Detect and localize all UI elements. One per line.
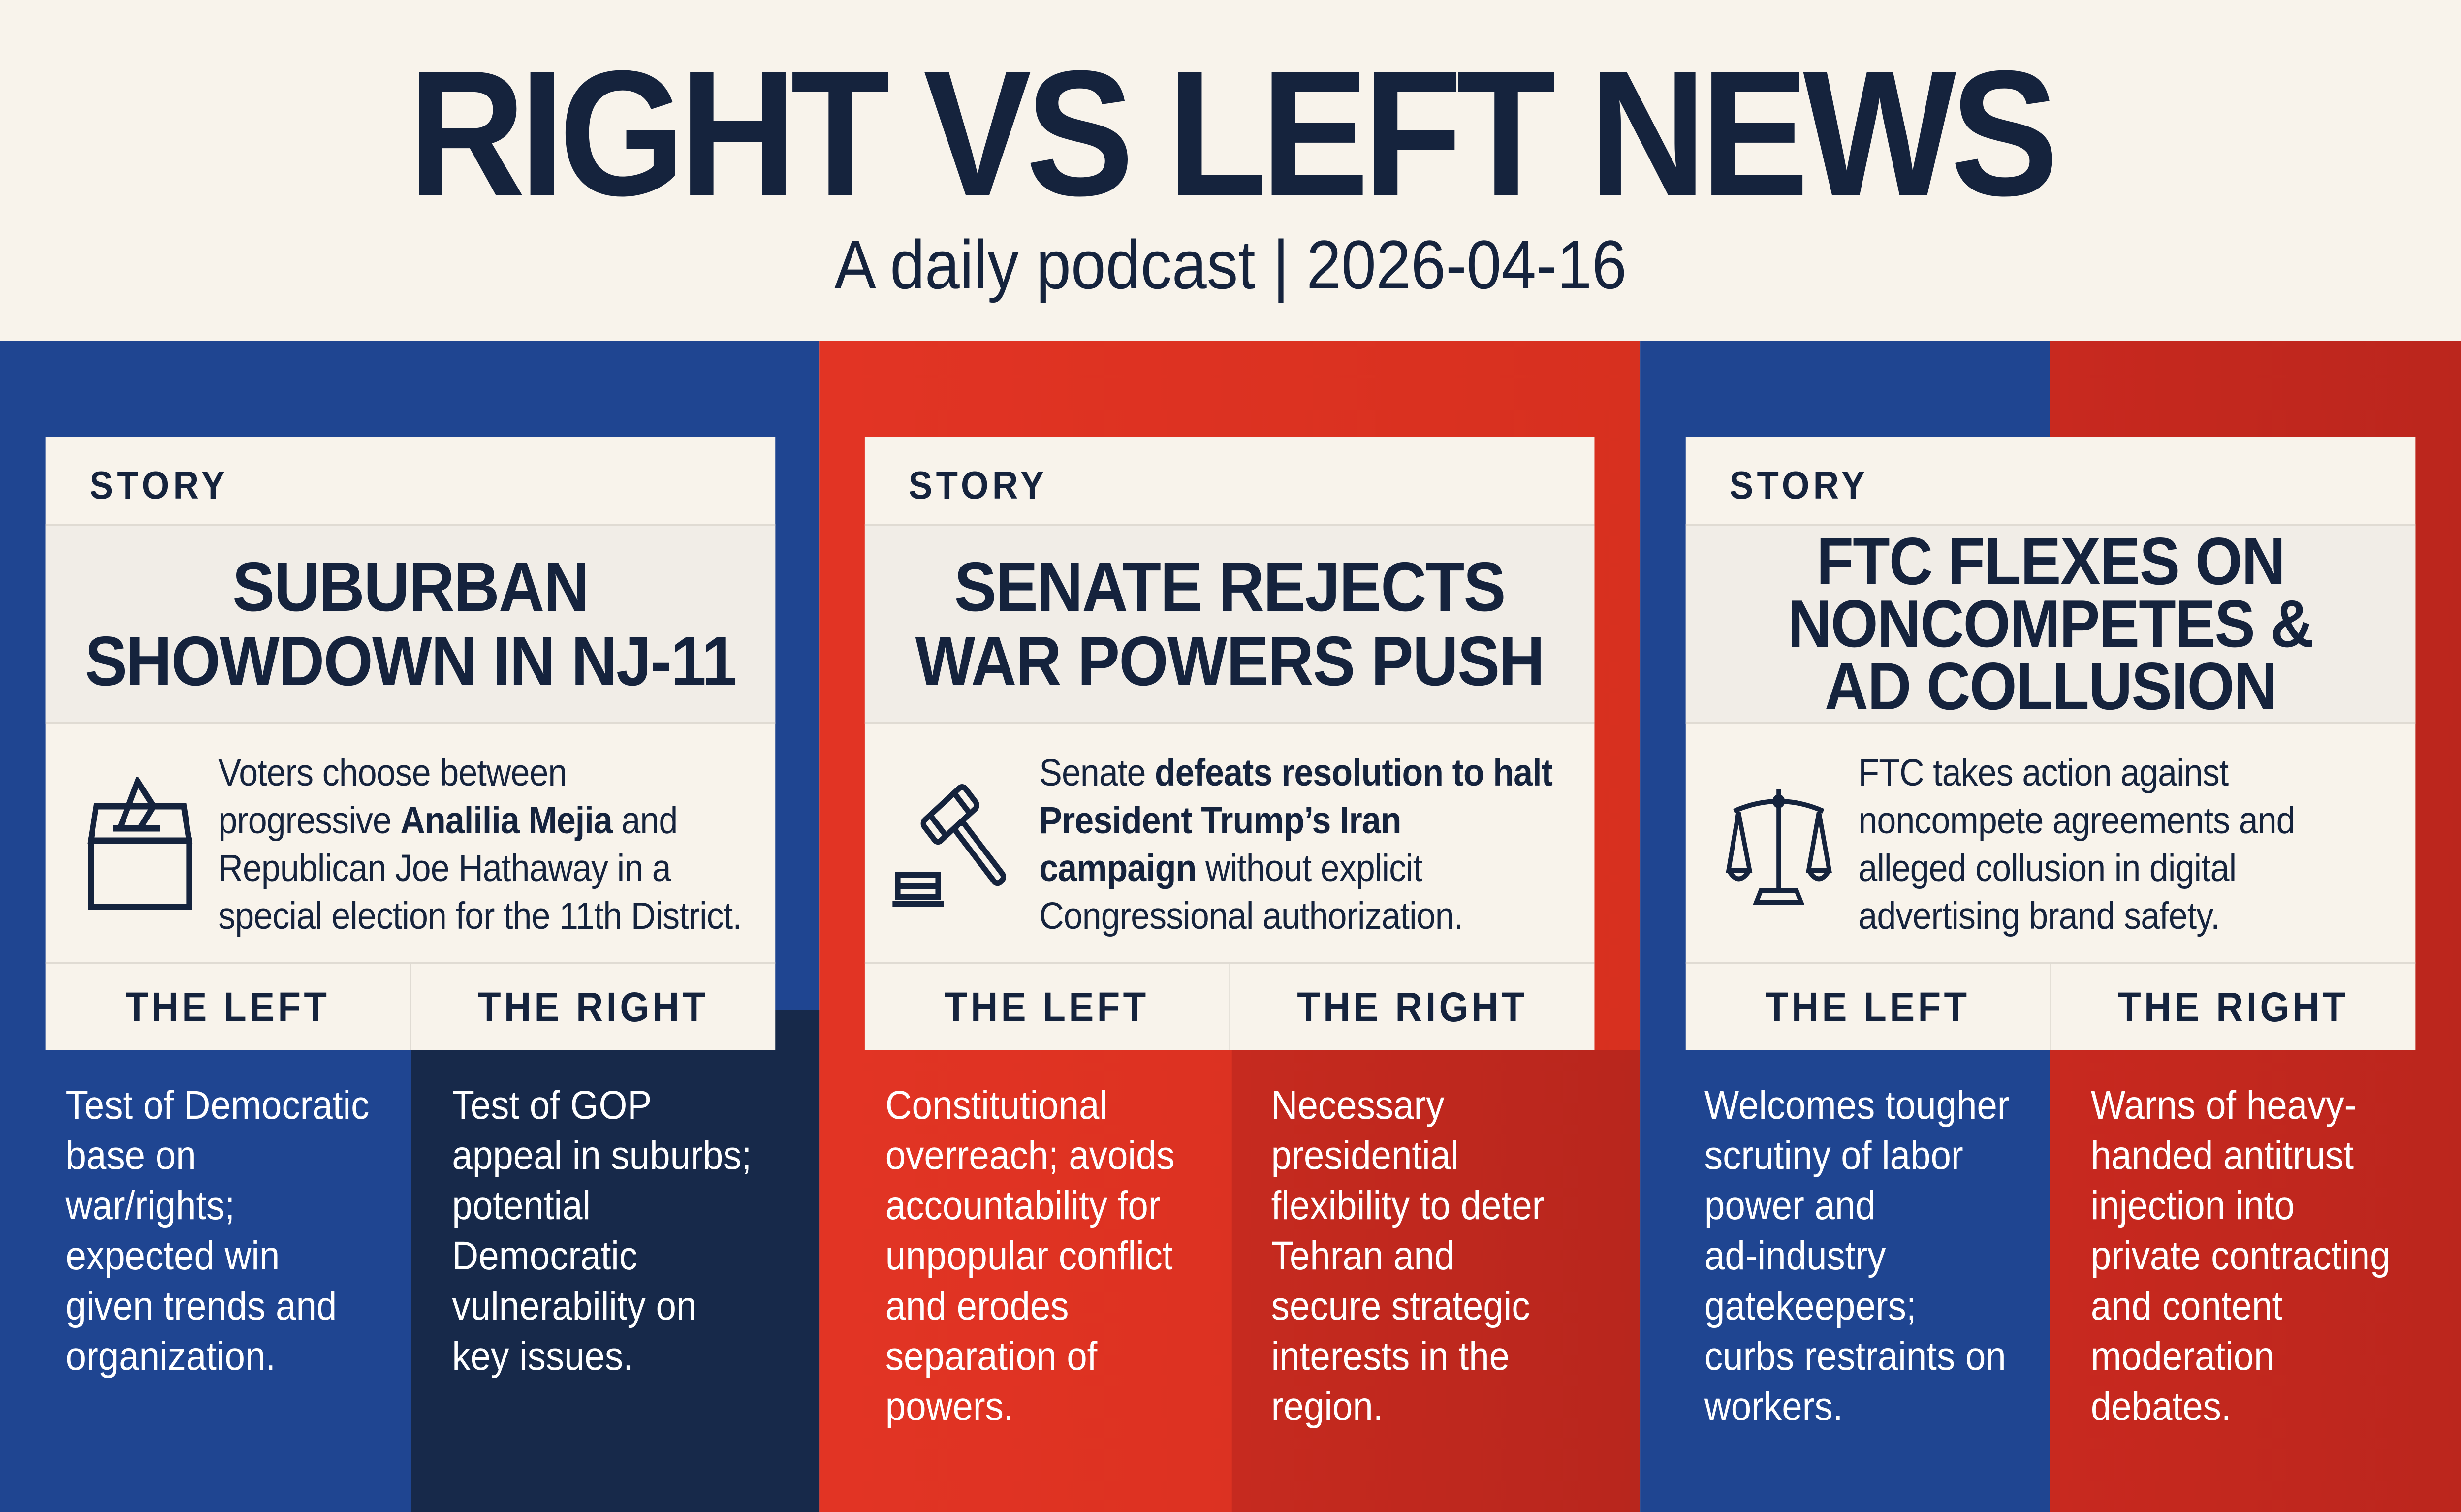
text: story 3 right: moderation: [2091, 1334, 2274, 1379]
story title: SENATE REJECTS: [954, 547, 1505, 626]
subtitle: A daily podcast | 2026-04-16: [834, 226, 1627, 303]
text: story 2 right: flexibility to deter: [1271, 1183, 1544, 1228]
description: advertising brand safety.: [1858, 895, 2220, 937]
text: story 1 left: expected win: [66, 1233, 280, 1278]
text: story 3 right: and content: [2091, 1284, 2282, 1328]
column backgrounds: [0, 341, 2461, 1512]
story title: SHOWDOWN IN NJ-11: [85, 622, 736, 700]
panel: story 3: [1686, 437, 2415, 1050]
icon: ballot box: [87, 777, 193, 910]
text: story 2 right: Necessary: [1271, 1083, 1445, 1128]
text: story 2 left: [885, 1083, 1175, 1429]
description: Congressional authorization.: [1039, 895, 1463, 937]
story label: STORY: [909, 463, 1048, 507]
icon: gavel: [892, 784, 1006, 907]
left/right header: THE RIGHT: [478, 984, 708, 1030]
text: story 1 left: war/rights;: [66, 1183, 235, 1228]
text: story 3 right: Warns of heavy-: [2091, 1083, 2356, 1128]
description: Voters choose between: [218, 752, 567, 794]
text: story 1 left: base on: [66, 1133, 196, 1178]
text: story 2 right: secure strategic: [1271, 1284, 1530, 1328]
text: story 3 left: gatekeepers;: [1704, 1284, 1917, 1328]
description: campaign without explicit: [1039, 847, 1422, 889]
text: story 2 left: overreach; avoids: [885, 1133, 1175, 1178]
text: story 2 right: interests in the: [1271, 1334, 1510, 1379]
panel: story 1: [46, 437, 775, 1050]
text: story 2 right: Tehran and: [1271, 1233, 1454, 1278]
left/right header: [865, 962, 1594, 1050]
text: story 2 right: presidential: [1271, 1133, 1459, 1178]
text: story 2 left: powers.: [885, 1384, 1014, 1429]
text: story 3 left: scrutiny of labor: [1704, 1133, 1963, 1178]
description: special election for the 11th District.: [218, 895, 742, 937]
panel: story 2: [865, 437, 1594, 1050]
text: story 3 right: injection into: [2091, 1183, 2295, 1228]
story title: WAR POWERS PUSH: [915, 622, 1544, 700]
text: story 1 left: organization.: [66, 1334, 276, 1379]
story title: NONCOMPETES &: [1788, 586, 2313, 661]
text: story 3 left: ad-industry: [1704, 1233, 1886, 1278]
text: story 2 left: separation of: [885, 1334, 1097, 1379]
text: story 2 left: and erodes: [885, 1284, 1069, 1328]
left/right header: THE RIGHT: [2118, 984, 2349, 1030]
text: story 3 right: [2091, 1083, 2390, 1429]
text: story 3 right: private contracting: [2091, 1233, 2390, 1278]
text: story 2 right: region.: [1271, 1384, 1383, 1429]
story label: STORY: [90, 463, 228, 507]
text: story 3 right: debates.: [2091, 1384, 2232, 1429]
text: story 2 left: unpopular conflict: [885, 1233, 1173, 1278]
text: story 1 right: appeal in suburbs;: [452, 1133, 752, 1178]
text: story 1 right: Test of GOP: [452, 1083, 652, 1128]
description: noncompete agreements and: [1858, 799, 2295, 842]
text: story 1 right: Democratic: [452, 1233, 637, 1278]
icon: scales: [1726, 789, 1832, 905]
description: [1858, 752, 2295, 937]
text: story 3 left: curbs restraints on: [1704, 1334, 2006, 1379]
description: FTC takes action against: [1858, 752, 2228, 794]
header: [0, 0, 2461, 341]
story title: FTC FLEXES ON: [1817, 524, 2285, 598]
text: story 1 right: potential: [452, 1183, 591, 1228]
description: Senate defeats resolution to halt: [1039, 752, 1552, 794]
title: RIGHT VS LEFT NEWS: [408, 33, 2053, 233]
text: story 1 right: key issues.: [452, 1334, 633, 1379]
description: [218, 752, 742, 937]
text: story 1 left: Test of Democratic: [66, 1083, 369, 1128]
text: story 2 right: [1271, 1083, 1544, 1429]
text: story 1 right: vulnerability on: [452, 1284, 696, 1328]
story title: [46, 524, 775, 724]
story title: [1686, 524, 2415, 724]
text: story 1 left: [65, 1083, 369, 1379]
description: Republican Joe Hathaway in a: [218, 847, 671, 889]
left/right header: THE LEFT: [945, 984, 1149, 1030]
left/right header: THE RIGHT: [1297, 984, 1528, 1030]
left/right header: [1686, 962, 2415, 1050]
left/right header: THE LEFT: [126, 984, 330, 1030]
text: story 1 right: [452, 1083, 752, 1379]
text: story 3 right: handed antitrust: [2091, 1133, 2354, 1178]
text: story 2 left: Constitutional: [885, 1083, 1107, 1128]
story title: SUBURBAN: [232, 547, 589, 626]
text: story 1 left: given trends and: [66, 1284, 337, 1328]
text: story 3 left: Welcomes tougher: [1704, 1083, 2010, 1128]
text: story 3 left: power and: [1704, 1183, 1876, 1228]
text: story 3 left: [1704, 1083, 2010, 1429]
description: President Trump’s Iran: [1039, 799, 1401, 842]
description: progressive Analilia Mejia and: [218, 799, 677, 842]
description: [1039, 752, 1552, 937]
description: alleged collusion in digital: [1858, 847, 2236, 889]
text: story 3 left: workers.: [1704, 1384, 1843, 1429]
text: story 2 left: accountability for: [885, 1183, 1161, 1228]
story title: [865, 524, 1594, 724]
left/right header: THE LEFT: [1766, 984, 1970, 1030]
left/right header: [46, 962, 775, 1050]
story label: STORY: [1730, 463, 1868, 507]
story title: AD COLLUSION: [1825, 649, 2276, 724]
